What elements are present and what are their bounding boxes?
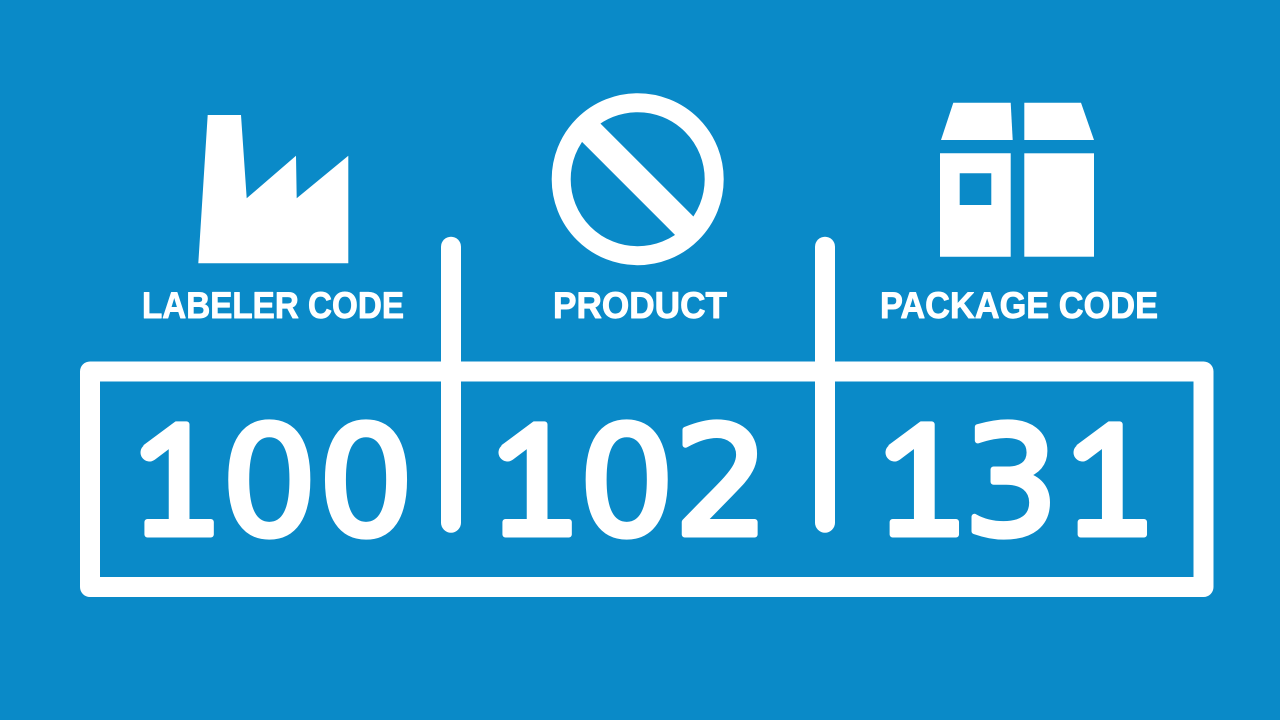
- divider: labeler and product: [441, 237, 461, 533]
- icon: prohibited sign: [561, 103, 714, 256]
- divider: product and package: [815, 237, 835, 533]
- panel: package code: [880, 103, 1158, 326]
- number: 102: 102: [487, 394, 770, 570]
- heading: labeler code: LABELER CODE: [142, 285, 404, 326]
- number: 100: 100: [129, 394, 414, 570]
- heading: product: PRODUCT: [553, 285, 727, 326]
- heading: package code: PACKAGE CODE: [880, 285, 1158, 326]
- code frame: [90, 372, 1204, 587]
- icon: factory: [198, 115, 348, 263]
- panel: product: [553, 103, 727, 326]
- panel: labeler code: [142, 115, 404, 326]
- icon: package box: [940, 103, 1094, 257]
- number: 131: 131: [874, 394, 1158, 570]
